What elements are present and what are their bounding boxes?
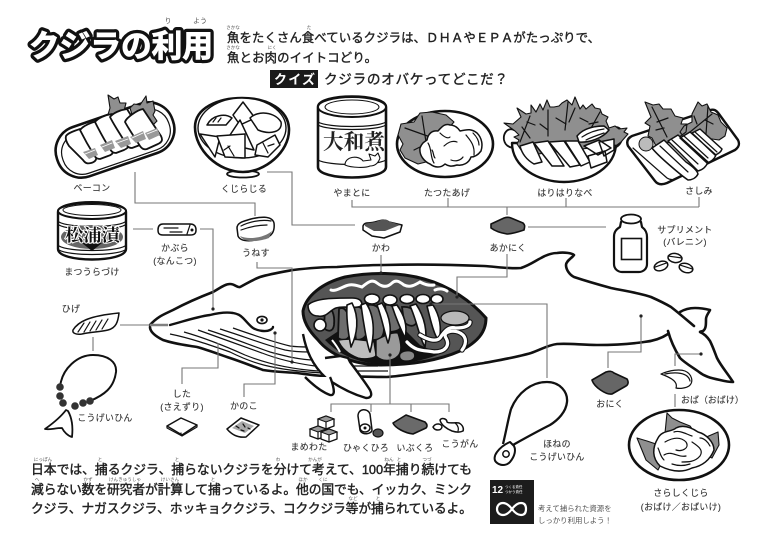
SDG 12 badge: 12 [492, 485, 504, 496]
food: food labels: ベーコン [74, 183, 110, 193]
food: hari-hari nabe [504, 97, 628, 182]
food: sarashi kujira [629, 410, 729, 512]
part: fluke meat [661, 370, 744, 405]
part: kawa [363, 220, 402, 253]
part: kabura: (なんこつ) [153, 256, 197, 266]
food: supplement [614, 214, 713, 274]
food: food labels: やまとに [334, 188, 370, 198]
food: yamato-ni can: 大和煮 [323, 130, 386, 154]
body text: けんきゅうしゃ [109, 476, 141, 483]
part: akaniku: あかにく [490, 243, 526, 253]
body text: 減らない数を研究者が計算して捕っているよ。他の国でも、イッカク、ミンク [31, 482, 472, 497]
food: sashimi [627, 102, 739, 184]
part: unesu: うねす [242, 248, 270, 258]
food: food labels: はりはりなべ [537, 188, 593, 198]
food: matsuura-zuke label: まつうらづけ [64, 267, 120, 277]
body text: くに [318, 477, 328, 483]
part: mamewata [291, 416, 337, 452]
part: baleen [62, 304, 119, 334]
body text: と [211, 477, 215, 482]
food: food labels: たつたあげ [424, 188, 470, 198]
part: testes: こうがん [442, 438, 478, 449]
part: tongue: した [173, 389, 191, 399]
part: unesu [237, 217, 274, 258]
food: supplement: サプリメント [657, 225, 713, 235]
title: り [164, 17, 172, 25]
SDG caption: 考えて捕られた資源を [538, 504, 612, 513]
title: よう [193, 17, 207, 25]
craft: bone pendant [495, 382, 585, 465]
body text: ほか [298, 476, 308, 483]
body text: にっぽん [34, 456, 53, 463]
part: kawa: かわ [372, 243, 390, 253]
part: kanoko [227, 401, 259, 437]
food: supplement: (バレニン) [663, 237, 707, 247]
intro text: 魚をたくさん食べているクジラは、ＤＨＡやＥＰＡがたっぷりで、 [227, 30, 600, 45]
food: matsuura-zuke can: 松浦漬 [65, 225, 123, 245]
whale organs cutaway [303, 273, 486, 365]
food: tatsuta-age [397, 111, 493, 177]
whale throat grooves [170, 328, 388, 373]
food: sarashi kujira: さらしくじら [653, 488, 709, 498]
body text: へ [35, 477, 40, 482]
intro text: さかな [226, 44, 240, 51]
food: food labels [74, 183, 713, 198]
craft: baleen rosary [45, 355, 133, 437]
body text: など [348, 495, 358, 501]
food: matsuura-zuke can [58, 202, 126, 260]
part: tongue: (さえずり) [160, 402, 204, 412]
part: oniku [592, 371, 628, 409]
SDG 12 badge: つくる責任 [505, 484, 523, 489]
body text: と [376, 496, 380, 501]
title: クジラの利用 [29, 29, 213, 64]
quiz heading: クイズ [274, 72, 315, 87]
part: tongue [160, 389, 204, 436]
intro text: 魚とお肉のイイトコどり。 [227, 51, 377, 65]
part: baleen: ひげ [62, 304, 80, 314]
quiz heading [270, 70, 508, 88]
title: クジラの利用 [29, 29, 213, 64]
body text [31, 456, 472, 516]
part: stomach: いぶくろ [397, 443, 433, 453]
food: yamato-ni can [318, 96, 386, 178]
intro text: さかな [226, 24, 240, 31]
body text: かんが [308, 456, 322, 463]
body text: と [397, 457, 401, 462]
part: testes [433, 419, 478, 449]
food: sarashi kujira: (おばけ／おばいけ) [641, 502, 721, 512]
craft: bone pendant: ほねの [543, 439, 571, 449]
body text: ねん [384, 457, 394, 463]
body text: 日本では、捕るクジラ、捕らないクジラを分けて考えて、100年捕り続けても [31, 462, 472, 477]
part: fluke meat: おば（おばけ） [681, 395, 744, 405]
SDG caption [538, 504, 612, 525]
body text: つづ [422, 456, 432, 462]
SDG 12 badge: つかう責任 [505, 489, 523, 494]
intro text: た [307, 25, 312, 31]
intro text [226, 24, 600, 65]
connector lines [93, 172, 701, 412]
body text: と [175, 457, 179, 462]
part: akaniku [490, 217, 526, 253]
part: mamewata: まめわた [291, 442, 327, 452]
body text: わ [276, 456, 281, 462]
body text: クジラ、ナガスクジラ、ホッキョククジラ、コククジラ等が捕られているよ。 [31, 501, 472, 516]
connector dots [211, 271, 703, 364]
whale body [150, 253, 733, 382]
food: whale soup bowl [195, 98, 289, 178]
quiz heading: クジラのオバケってどこだ？ [324, 72, 508, 87]
body text: かず [83, 476, 93, 483]
body text: と [98, 457, 102, 462]
part: oniku: おにく [596, 399, 624, 409]
craft: baleen rosary: こうげいひん [77, 413, 133, 423]
food: food labels: くじらじる [221, 184, 267, 194]
SDG 12 badge [490, 480, 534, 524]
part: hyakuhiro [343, 410, 389, 453]
food: bacon [49, 95, 181, 184]
SDG caption: しっかり利用しよう！ [538, 516, 612, 525]
craft: bone pendant: こうげいひん [529, 452, 585, 462]
part: stomach [393, 415, 433, 453]
part: hyakuhiro: ひゃくひろ [343, 443, 389, 453]
body text: けいさん [161, 476, 180, 483]
part: kabura [153, 224, 197, 266]
intro text: にく [267, 45, 277, 51]
whale flippers [303, 334, 371, 398]
part: kanoko: かのこ [230, 401, 258, 411]
food: food labels: さしみ [685, 186, 713, 196]
part: kabura: かぶら [161, 243, 189, 253]
